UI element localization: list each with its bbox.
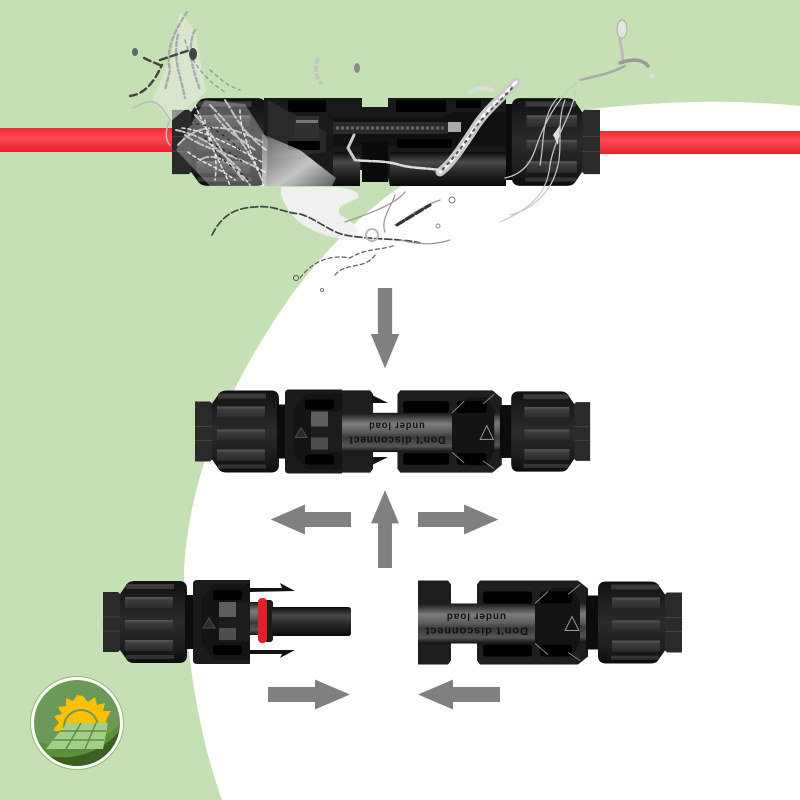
water streak across body [348,82,516,172]
water smear [262,134,336,186]
arrow: down to assembled connector [371,288,399,368]
water over left nut [176,100,268,186]
red cable [0,128,800,154]
male connector [103,580,351,664]
assembled connector [195,390,590,474]
arrow: right [418,504,498,534]
top connector with water splash [130,12,655,292]
water right streams [500,20,655,222]
red seal ring [258,598,267,643]
water top left splash [130,12,240,145]
water blob below [281,187,359,240]
latch tabs [250,583,295,658]
ground [38,724,120,766]
solar panel [46,723,108,749]
logo: sun over solar panel [30,676,124,770]
water lower splash [212,192,455,292]
connector body [172,98,600,186]
water small middle splash [316,58,360,84]
contact pin [272,607,351,636]
female connector [418,580,682,664]
arrow: left, bottom [418,680,500,710]
arrow: right, bottom [268,680,350,710]
arrow: up [371,490,399,568]
arrow: left [271,504,351,534]
sun [54,695,111,745]
